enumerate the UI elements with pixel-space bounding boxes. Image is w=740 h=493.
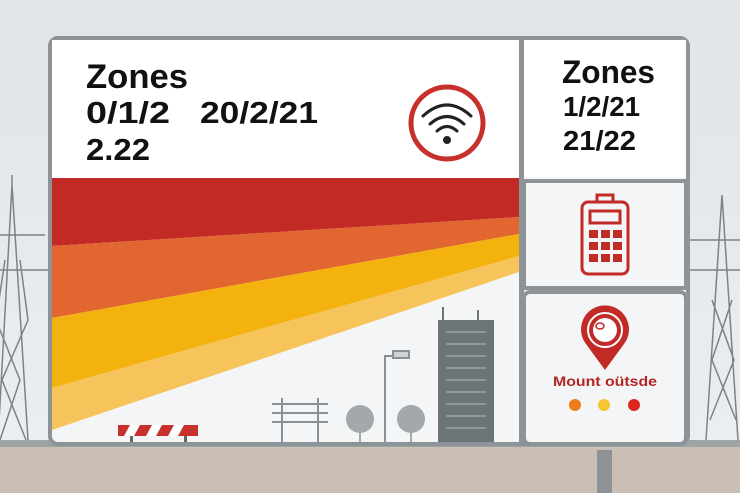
- text: zone codes left: [86, 95, 318, 167]
- legend dots: [569, 399, 640, 411]
- scene: bench sign: [272, 398, 328, 442]
- icon: meter device: [582, 195, 628, 274]
- sign pole: [597, 450, 612, 493]
- scene: street lamp: [385, 351, 409, 442]
- chart: coloured signal bands: [52, 178, 519, 430]
- ground: [0, 446, 740, 493]
- text: zone codes right: 21/22: [563, 125, 636, 156]
- main sign frame: [50, 38, 688, 444]
- text: zone codes left: 20/2/21: [200, 95, 318, 130]
- text: zone codes right: 1/2/21: [563, 91, 640, 122]
- scene: building: [438, 307, 494, 442]
- text: zone codes left: 0/1/2: [86, 95, 170, 130]
- panel: left header: [52, 40, 519, 178]
- scene: barrier: [118, 425, 198, 442]
- text: mount outside: Mount oütsde: [553, 373, 657, 389]
- scene: trees: [346, 405, 425, 442]
- panel: right mount outside: [524, 292, 686, 444]
- divider: [519, 40, 524, 444]
- pylon: right: [690, 195, 740, 440]
- text: zone codes right: [563, 91, 640, 156]
- text: zone codes left: 2.22: [86, 132, 150, 167]
- icon: location pin: [581, 305, 629, 370]
- heading: zones left: Zones: [86, 58, 188, 96]
- icon: wifi: [411, 87, 483, 159]
- panel: right calculator: [524, 181, 686, 288]
- panel: right zones: [524, 40, 686, 177]
- heading: zones right: Zones: [562, 54, 655, 90]
- pylon: left: [0, 175, 50, 440]
